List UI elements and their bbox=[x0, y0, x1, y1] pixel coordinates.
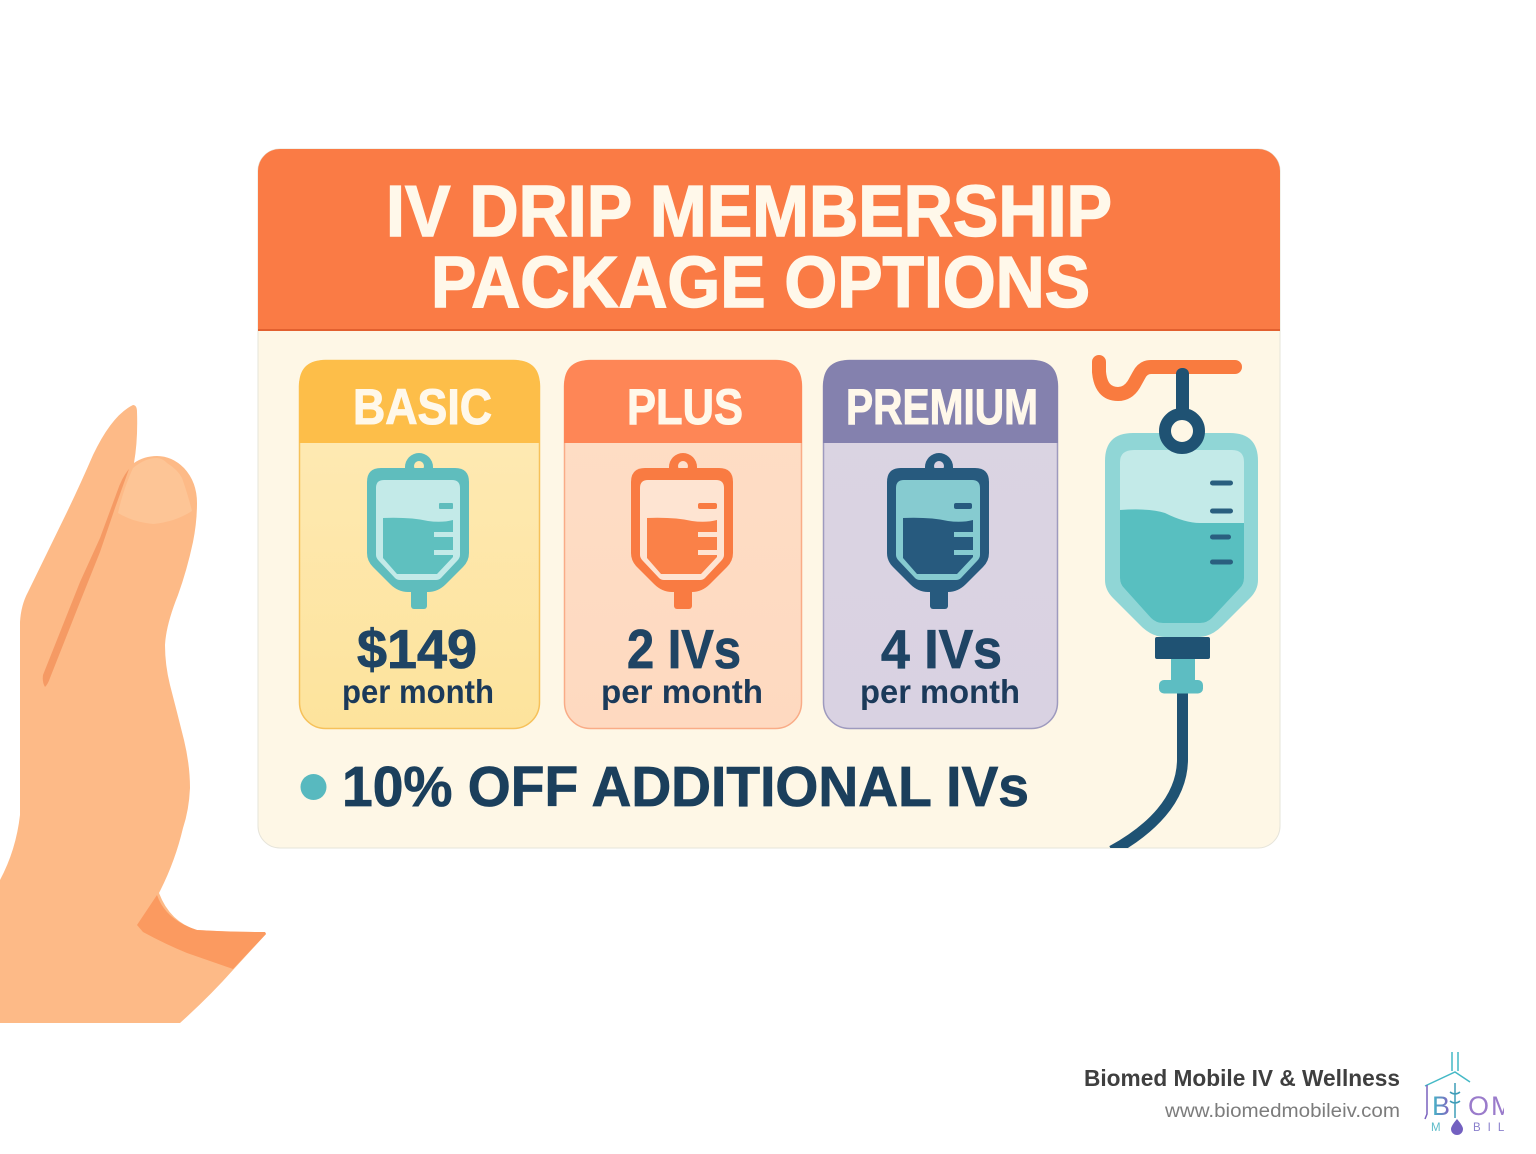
staff bbox=[1450, 1083, 1460, 1118]
icon: teal IV bag bbox=[367, 453, 469, 609]
icon: orange IV bag bbox=[631, 453, 733, 609]
premium period: per month bbox=[860, 673, 1020, 710]
measure ticks bbox=[1210, 480, 1233, 564]
footer: website: www.biomedmobileiv.com bbox=[1164, 1100, 1400, 1122]
basic header bbox=[299, 360, 540, 443]
plus allowance: 2 IVs bbox=[627, 618, 741, 680]
footer: company name: Biomed Mobile IV & Wellness bbox=[1084, 1065, 1400, 1091]
discount text: 10% OFF ADDITIONAL IVs bbox=[342, 755, 1029, 819]
plan: basic bbox=[299, 360, 540, 728]
premium label: PREMIUM bbox=[846, 379, 1038, 435]
callout: additional IV discount bbox=[300, 755, 1029, 819]
plus label: PLUS bbox=[627, 379, 743, 435]
premium header bbox=[823, 360, 1058, 443]
house outline bbox=[1425, 1052, 1470, 1086]
plus header bbox=[564, 360, 802, 443]
illustration: hand holding the card bbox=[0, 405, 266, 1023]
bag outer shell bbox=[1105, 433, 1258, 637]
plus period: per month bbox=[601, 673, 763, 710]
finger crease bbox=[43, 469, 129, 687]
teal bullet bbox=[300, 774, 326, 800]
title line two: PACKAGE OPTIONS bbox=[431, 243, 1090, 323]
logo word: B bbox=[1432, 1091, 1451, 1121]
hanger stem and ring bbox=[1165, 368, 1199, 448]
logo second row end: BIL bbox=[1473, 1122, 1511, 1134]
logo water drop bbox=[1451, 1119, 1463, 1135]
webbing shadow bbox=[137, 895, 266, 969]
connector bbox=[1159, 659, 1203, 694]
orange header band bbox=[258, 149, 1280, 331]
basic label: BASIC bbox=[353, 379, 492, 435]
membership card panel bbox=[258, 149, 1280, 848]
bag cap bbox=[1155, 637, 1210, 659]
bag window bbox=[1120, 450, 1244, 623]
bag liquid bbox=[1120, 509, 1244, 623]
plan: premium bbox=[823, 360, 1058, 728]
tubing bbox=[1112, 690, 1182, 851]
basic period: per month bbox=[342, 673, 494, 710]
premium allowance: 4 IVs bbox=[881, 618, 1002, 680]
orange hook bbox=[1099, 362, 1235, 394]
logo second row: M bbox=[1431, 1122, 1441, 1134]
plan: plus bbox=[564, 360, 802, 728]
title line one: IV DRIP MEMBERSHIP bbox=[386, 172, 1112, 252]
icon: navy IV bag bbox=[887, 453, 989, 609]
logo: Biomed Mobile bbox=[1424, 1052, 1504, 1135]
fingernail bbox=[118, 458, 192, 524]
illustration: hanging IV bag bbox=[1099, 362, 1258, 851]
hand shape bbox=[0, 405, 266, 1023]
basic price: $149 bbox=[357, 618, 477, 680]
logo word end: OM bbox=[1468, 1091, 1516, 1121]
